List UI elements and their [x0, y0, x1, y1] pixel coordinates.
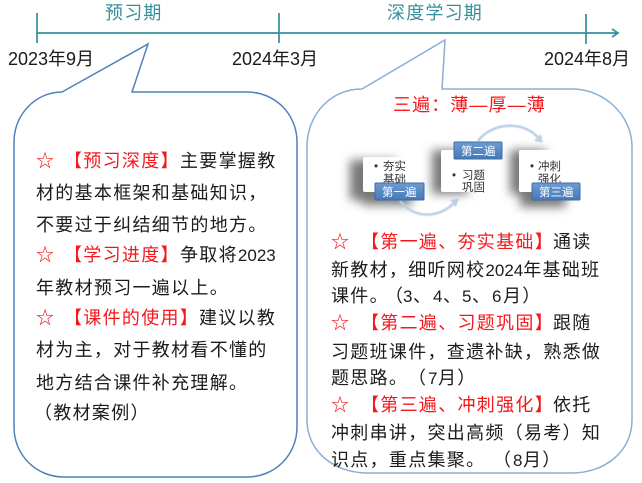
pass one text: 通读 [553, 232, 592, 252]
study progress text: ☆ [36, 245, 55, 265]
pass one text: 3 [403, 287, 412, 306]
pass three text: 8 [513, 451, 522, 470]
pass one text: 【第一遍、夯实基础】 [361, 232, 554, 252]
label: pass two [454, 142, 502, 159]
pass three text: 【第三遍、冲刺强化】 [361, 395, 554, 415]
study progress text: 争取将2023 [180, 245, 276, 265]
pass one text: 课件。 [331, 286, 389, 306]
label: pass one [375, 183, 424, 200]
preview depth text: 材的基本框架和基础知识， [36, 183, 268, 203]
pass one text: 6 [492, 287, 501, 306]
pass three text: 依托 [553, 395, 592, 415]
preview depth text: ☆ [36, 151, 55, 171]
preview depth text: 主要掌握教 [180, 151, 276, 171]
pass one text: 4 [433, 287, 442, 306]
arrow: pass one to pass two [400, 200, 457, 215]
date: 2024年8月: 2024年8月 [544, 49, 630, 69]
card shadows [350, 150, 566, 207]
label: pass three: 第三遍 [539, 185, 574, 199]
pass two text: （ [408, 368, 427, 388]
pass three text: （ [493, 450, 512, 470]
timeline axis arrow [37, 29, 618, 37]
courseware use text: 材为主，对于教材看不懂的 [36, 340, 268, 360]
pass two text: 习题班课件，查遗补缺，熟悉做 [331, 342, 601, 362]
pass one text: 新教材，细听网校2024年基础班 [331, 260, 600, 280]
card: solid foundation: 夯实 [383, 159, 406, 173]
courseware use text: 建议以教 [199, 308, 276, 328]
bubble outline left [14, 44, 297, 477]
study progress text [36, 245, 276, 298]
label: pass three [532, 183, 580, 200]
study progress text: 【学习进度】 [64, 245, 180, 265]
pass one text: 、 [472, 286, 491, 306]
pass two text: ☆ [331, 313, 350, 333]
pass one text: （ [385, 286, 404, 306]
card: final sprint: • [530, 161, 534, 173]
pass two text: 【第二遍、习题巩固】 [361, 313, 554, 333]
pass two text: 题思路。 [331, 368, 408, 388]
pass one text: ☆ [331, 232, 350, 252]
courseware use text: 【课件的使用】 [64, 308, 199, 328]
preview depth text: 【预习深度】 [64, 151, 180, 171]
pass two text: 7 [428, 369, 437, 388]
card: exercise consolidation: 巩固 [462, 181, 485, 194]
card: final sprint: 强化 [538, 172, 561, 186]
pass three text: 月） [523, 450, 562, 470]
courseware use text [34, 308, 276, 423]
arrow: pass two to pass three [478, 126, 541, 141]
card: solid foundation: 基础 [383, 173, 406, 186]
phase label: preview: 预习期 [105, 3, 163, 23]
study progress text: 年教材预习一遍以上。 [36, 278, 229, 298]
courseware use text: 地方结合课件补充理解。 [36, 373, 248, 393]
diagram: three passes process [350, 126, 580, 215]
courseware use text: ☆ [36, 308, 55, 328]
pass one text [331, 232, 600, 306]
label: pass one: 第一遍 [382, 185, 417, 199]
timeline [8, 3, 630, 69]
panel: deep study speech bubble [307, 40, 632, 473]
panel: preview period speech bubble [14, 44, 297, 477]
preview depth text: 不要过于纠结细节的地方。 [36, 215, 268, 235]
preview depth text [36, 151, 276, 235]
phase label: deep study: 深度学习期 [387, 3, 483, 23]
pass three text: ☆ [331, 395, 350, 415]
card: solid foundation: • [374, 161, 378, 173]
card: solid foundation [363, 157, 421, 192]
card: exercise consolidation [441, 150, 499, 194]
card: final sprint [519, 150, 577, 192]
courseware use text: （教材案例） [34, 403, 150, 423]
pass one text: 、 [413, 286, 432, 306]
card: exercise consolidation: • [452, 170, 456, 182]
pass two text [331, 313, 601, 388]
label: pass two: 第二遍 [461, 144, 496, 158]
heading: three passes: 三遍：薄—厚—薄 [393, 95, 546, 115]
pass one text: 月） [503, 286, 542, 306]
date: 2024年3月: 2024年3月 [232, 49, 318, 69]
pass two text: 月） [438, 368, 477, 388]
bubble outline right [307, 40, 632, 473]
date: 2023年9月: 2023年9月 [8, 49, 94, 69]
pass one text: 5 [462, 287, 471, 306]
pass one text: 、 [443, 286, 462, 306]
timeline ticks [37, 13, 586, 44]
pass three text: 冲刺串讲，突出高频（易考）知 [331, 423, 601, 443]
pass three text: 识点，重点集聚。 [331, 450, 485, 470]
card: final sprint: 冲刺 [538, 159, 561, 173]
card: exercise consolidation: 习题 [462, 169, 485, 182]
pass two text: 跟随 [553, 313, 592, 333]
pass three text [331, 395, 601, 470]
